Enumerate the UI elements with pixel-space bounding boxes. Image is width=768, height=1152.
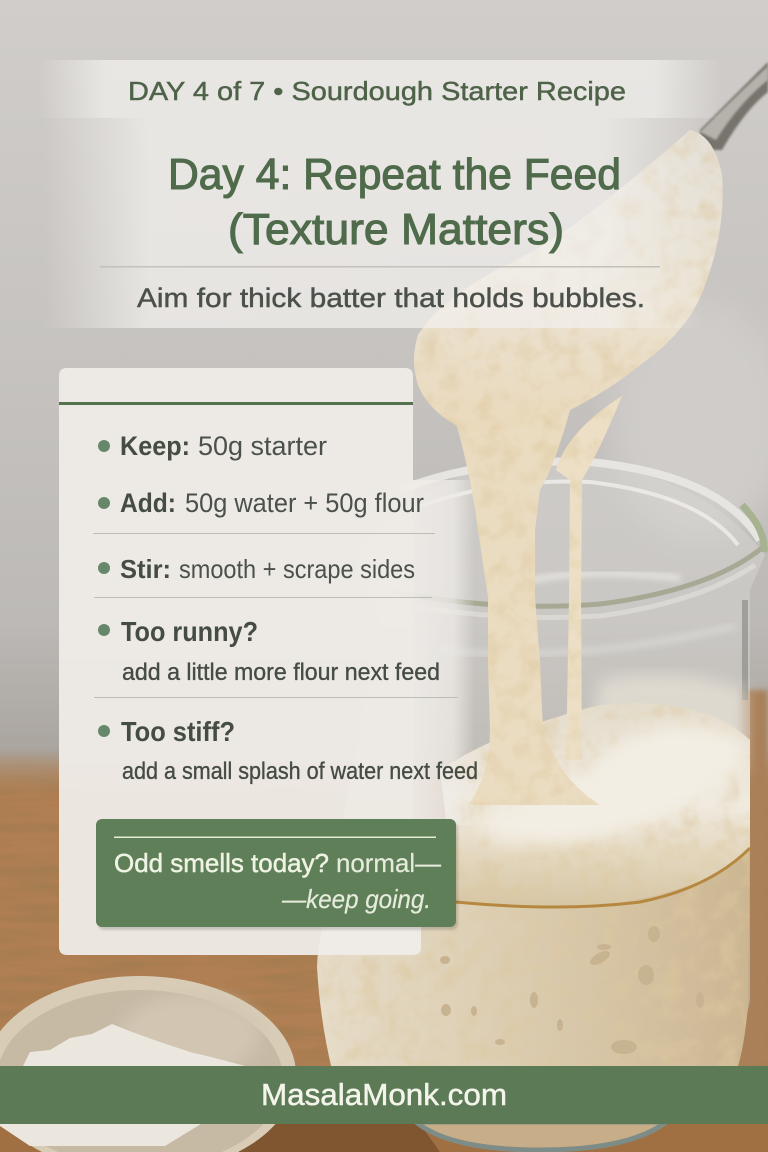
gold band line (456, 848, 750, 907)
title: Day 4: Repeat the Feed (168, 150, 621, 199)
tip: too runny (98, 616, 440, 686)
tip: too runny: add a little more flour next feed (122, 659, 440, 686)
panel: feeding steps card (59, 368, 478, 955)
header band: title and subtitle (44, 118, 704, 328)
tip: too stiff (98, 716, 478, 785)
callout: odd smells: normal— (336, 848, 441, 878)
tip: too runny: Too runny? (121, 616, 258, 647)
tag text: DAY 4 of 7 • Sourdough Starter Recipe (128, 76, 626, 106)
flour mound (0, 1024, 245, 1146)
spoon with batter and drips (414, 62, 768, 805)
step: keep (98, 431, 327, 461)
callout: odd smells: Odd smells today? (114, 848, 329, 878)
step: add: Add: (120, 488, 176, 518)
step: stir: Stir: (120, 554, 171, 584)
callout: odd smells (96, 819, 458, 930)
step: add: 50g water + 50g flour (185, 488, 424, 518)
thin drip (556, 396, 622, 760)
step: keep: 50g starter (198, 431, 327, 461)
step: keep: Keep: (120, 431, 190, 461)
jar base glass (416, 1122, 666, 1150)
foam layer (440, 703, 750, 907)
step: stir: smooth + scrape sides (179, 554, 415, 584)
glass jar (317, 460, 765, 1150)
callout: odd smells: —keep going. (281, 884, 431, 914)
tip: too stiff: add a small splash of water next feed (122, 758, 478, 785)
tip: too stiff: Too stiff? (121, 716, 235, 747)
batter bubbles (440, 926, 704, 1054)
subtitle: Aim for thick batter that holds bubbles. (137, 283, 645, 313)
inner residue smears (500, 574, 680, 590)
step: stir (98, 554, 415, 584)
batter lower body (317, 830, 750, 1070)
batter in spoon (414, 130, 723, 432)
title: (Texture Matters) (228, 205, 564, 254)
title (168, 150, 621, 254)
background: grey wall and wooden table (0, 512, 768, 1152)
main drip (455, 410, 600, 805)
flour bowl (0, 976, 296, 1152)
footer banner (0, 1066, 768, 1124)
website: MasalaMonk.com (261, 1077, 507, 1112)
header band: day tag (38, 60, 722, 118)
jar rim (395, 462, 764, 700)
spoon handle (700, 62, 768, 150)
